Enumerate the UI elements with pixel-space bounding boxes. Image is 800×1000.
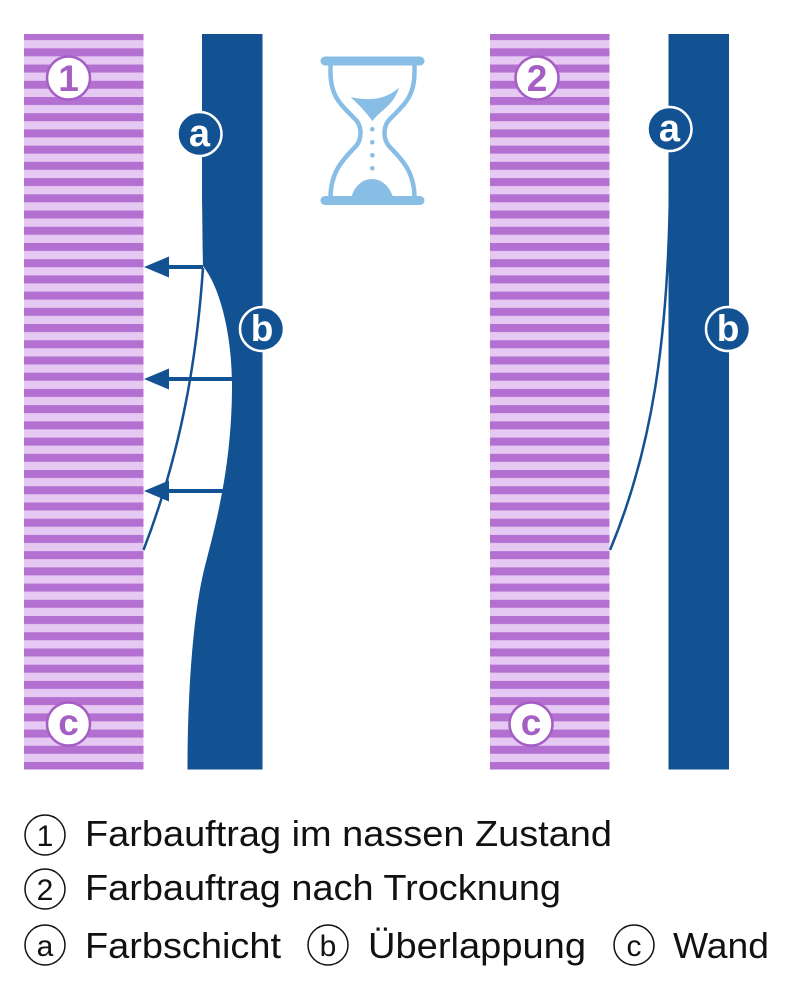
legend item 2: Farbauftrag nach Trocknung [85, 867, 561, 908]
panel: wet state [24, 34, 284, 770]
legend item b: Überlappung [368, 925, 586, 966]
badge c: c [58, 702, 79, 743]
badge 2 [516, 56, 558, 100]
badge b: b [717, 308, 739, 349]
dried profile line [610, 190, 670, 550]
wall 2 [490, 34, 610, 770]
arrow middle [144, 368, 232, 390]
arrow bottom [144, 480, 223, 502]
badge 2: 2 [527, 58, 547, 99]
badge b [240, 307, 284, 351]
legend item a: Farbschicht [85, 925, 281, 966]
wall 1 [24, 34, 144, 770]
badge c [510, 702, 552, 746]
badge a: a [189, 113, 211, 155]
badge c: c [521, 702, 541, 743]
dried profile line [144, 268, 203, 550]
legend item 2: 2 [37, 874, 53, 907]
badge b [706, 307, 750, 351]
badge a: a [659, 108, 681, 150]
legend [25, 813, 769, 966]
legend item 1: 1 [37, 820, 53, 853]
badge c [47, 702, 90, 746]
badge 1 [47, 56, 90, 100]
arrow top [144, 256, 203, 278]
legend item a: a [37, 930, 54, 963]
badge 1: 1 [58, 58, 79, 99]
legend item c: c [626, 930, 642, 963]
badge b: b [251, 308, 273, 349]
badge a [178, 112, 222, 156]
legend item c [614, 925, 769, 966]
icon: hourglass [320, 56, 424, 205]
panel: dried state [490, 34, 750, 770]
legend item c: Wand [673, 925, 769, 966]
legend item 1: Farbauftrag im nassen Zustand [85, 813, 612, 854]
badge a [648, 107, 692, 151]
paint layer wet [188, 34, 262, 770]
legend item b: b [320, 930, 336, 963]
paint layer dry [668, 34, 729, 770]
